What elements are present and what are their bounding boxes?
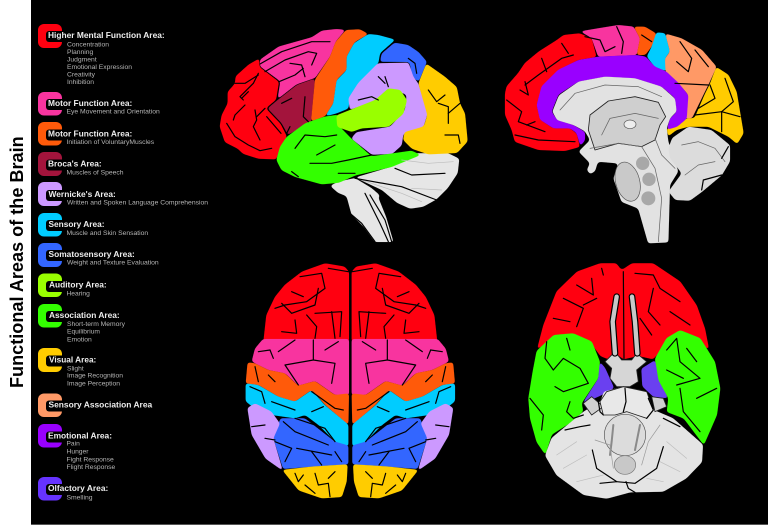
motor eye area [251,338,350,396]
legend item: association: Equilibrium [67,329,100,336]
legend item: visual: Image Recognition [67,373,123,380]
brain: lateral view [219,28,468,243]
somatosensory area [273,418,349,470]
legend item: sensory association [38,394,153,417]
legend item: motor function voluntary [38,122,155,146]
inner structures [560,85,728,242]
legend item: broca: Broca's Area: [48,159,102,169]
legend item: somatosensory [38,243,159,267]
legend item: auditory: Auditory Area: [49,279,107,289]
cerebellum [353,153,460,209]
sulci [507,27,740,142]
legend item: broca: Muscles of Speech [66,169,124,176]
legend item: broca [38,152,124,176]
cerebellum [668,126,731,201]
title strip: Functional Areas of the Brain [7,136,27,388]
frontal lobe [219,57,288,160]
legend item: motor function eye: Motor Function Area: [48,98,132,108]
legend item: motor function eye [38,92,160,116]
legend item: somatosensory: Somatosensory Area: [48,249,135,259]
wernicke area [247,403,284,472]
olfactory area left [581,360,615,405]
legend item: motor function voluntary: Initiation of VoluntaryMuscles [66,139,155,146]
legend item: sensory [38,213,148,237]
brain: top view [245,263,456,499]
legend item: visual: Slight [67,365,84,372]
frontal area [504,33,597,152]
cerebellum [544,386,704,499]
association area right [654,329,721,446]
emotional area [536,54,689,147]
motor voluntary area [633,26,657,56]
sensory area [646,32,671,72]
wernicke area [348,62,428,155]
motor voluntary area [245,362,350,426]
legend item: motor function eye: Eye Movement and Orientation [66,108,160,116]
legend item: olfactory: Smelling [66,494,93,501]
legend item: emotional: Hunger [66,449,89,456]
legend item: emotional [38,424,115,471]
midline fissure [348,268,352,498]
legend item: visual: Image Perception [67,380,120,387]
legend item: emotional: Pain [66,441,80,448]
sulci [530,268,717,492]
legend item: olfactory: Olfactory Area: [48,483,108,493]
legend item: wernicke: Written and Spoken Language Comprehension [67,200,208,207]
legend item: higher mental function: Concentration [67,42,109,48]
motor eye area [259,28,347,101]
legend item: emotional: Flight Response [66,464,115,471]
sensory association area [664,33,717,119]
legend item: auditory [38,274,107,298]
thalamus zone [588,97,666,150]
frontal area [536,263,710,360]
legend item: association: Short-term Memory [67,321,126,328]
brain: medial view [504,24,744,244]
frontal area [263,263,350,342]
brainstem [329,177,394,243]
olfactory area right [641,359,669,399]
legend item: sensory: Sensory Area: [48,219,104,229]
sulci [227,42,460,242]
legend item: higher mental function: Judgment [67,56,97,64]
legend item: higher mental function: Higher Mental Function Area: [48,30,165,40]
sulci [250,268,348,497]
legend item: higher mental function: Planning [67,49,94,56]
legend item: higher mental function: Emotional Expression [67,64,132,71]
legend item: association: Association Area: [49,310,120,320]
legend item: somatosensory: Weight and Texture Evaluation [67,260,159,266]
legend item: sensory: Muscle and Skin Sensation [66,230,148,237]
motor voluntary area [310,29,370,122]
legend item: visual [38,348,123,387]
legend item: wernicke [38,182,208,207]
legend item: sensory association: Sensory Association Area [48,399,153,409]
visual area [281,464,348,499]
legend item: higher mental function: Inhibition [67,79,94,86]
legend [38,24,208,501]
legend item: motor function voluntary: Motor Function Area: [48,128,132,138]
brain: bottom view [528,263,721,499]
legend item: association [38,304,126,343]
auditory area [336,88,408,133]
right hemisphere [351,263,456,499]
left and right hemisphere [245,263,350,499]
legend item: visual: Visual Area: [49,355,96,365]
association area left [528,333,601,456]
legend item: wernicke: Wernicke's Area: [48,189,116,199]
legend item: higher mental function [38,24,165,86]
central structures [583,352,667,474]
olfactory tract left [613,297,617,353]
sensory area [245,383,349,447]
visual area [402,63,468,155]
visual area [666,66,744,145]
olfactory tract right [632,297,637,353]
broca area [267,78,316,136]
association area [276,114,422,185]
motor eye area [578,24,641,57]
somatosensory area [379,42,428,83]
sensory area [324,33,397,117]
legend item: olfactory [38,477,108,501]
legend item: higher mental function: Creativity [67,72,96,78]
brain core [552,76,679,244]
legend item: auditory: Hearing [66,291,90,298]
legend item: association: Emotion [67,336,92,343]
legend item: emotional: Emotional Area: [48,430,112,440]
legend item: emotional: Fight Response [66,456,114,463]
